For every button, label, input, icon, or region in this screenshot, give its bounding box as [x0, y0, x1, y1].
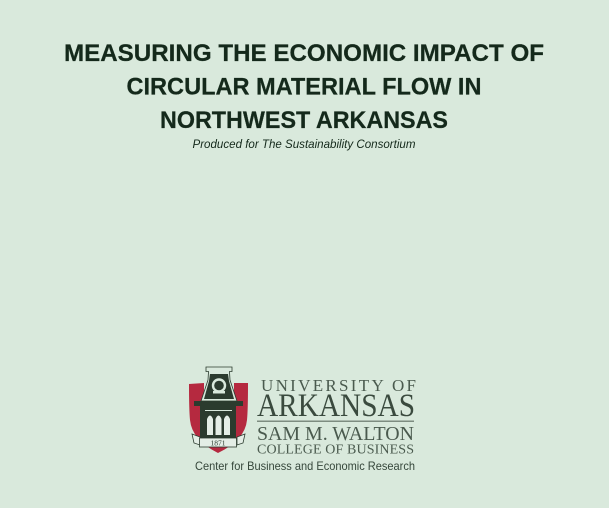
wordmark: ARKANSAS	[257, 388, 415, 424]
title	[64, 40, 544, 134]
wordmark: COLLEGE OF BUSINESS	[257, 442, 414, 458]
tower windows	[205, 410, 232, 411]
banner	[192, 434, 245, 445]
icon: university crest	[189, 367, 248, 453]
wordmark	[257, 376, 416, 458]
tower cornice	[194, 401, 243, 406]
wordmark: UNIVERSITY OF	[261, 376, 416, 395]
title: CIRCULAR MATERIAL FLOW IN	[126, 74, 482, 100]
center name: Center for Business and Economic Research	[195, 459, 415, 473]
banner year: 1871	[210, 438, 226, 448]
title: MEASURING THE ECONOMIC IMPACT OF	[64, 40, 544, 67]
title: NORTHWEST ARKANSAS	[160, 107, 448, 134]
tower medallion	[213, 380, 225, 392]
shield	[189, 383, 248, 453]
tower roof	[201, 367, 237, 401]
tower body	[200, 406, 236, 439]
subtitle: Produced for The Sustainability Consortium	[192, 137, 416, 151]
wordmark: SAM M. WALTON	[257, 423, 414, 445]
